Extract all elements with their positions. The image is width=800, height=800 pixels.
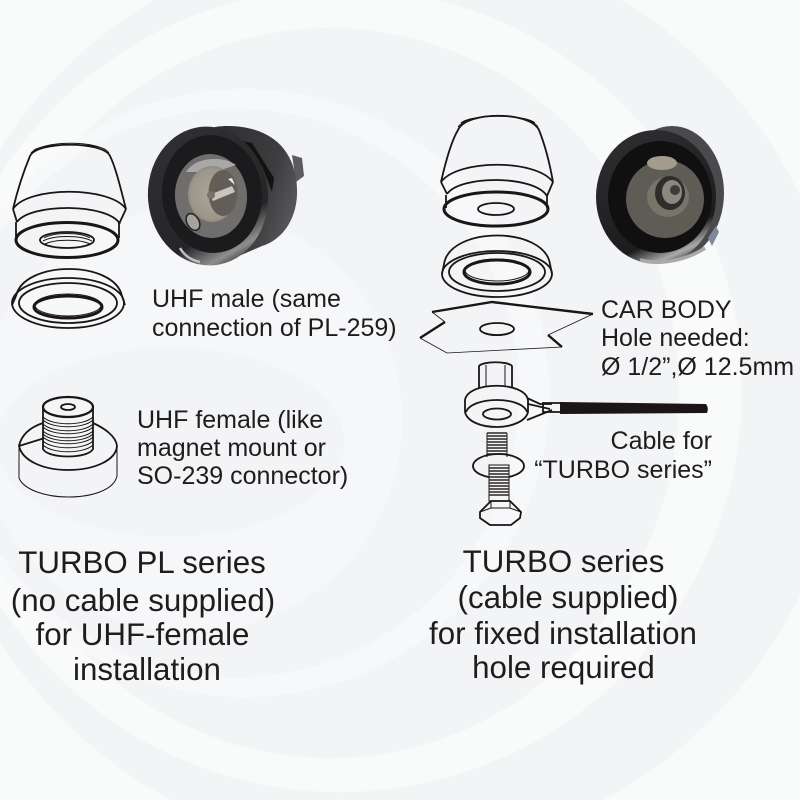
label: car body xyxy=(601,296,794,381)
label: cable xyxy=(534,427,712,484)
icon: left ring washer xyxy=(12,269,125,328)
label: UHF female: magnet mount or xyxy=(137,434,326,462)
panel: TURBO series xyxy=(420,116,794,685)
icon: cable lug and bolt xyxy=(465,362,708,525)
heading: TURBO series xyxy=(429,544,697,685)
panel: TURBO PL series xyxy=(11,122,397,687)
icon: UHF female connector xyxy=(19,397,117,497)
label: UHF male: UHF male (same xyxy=(152,285,341,313)
label: UHF male xyxy=(152,285,397,342)
label: car body: Hole needed: xyxy=(601,324,750,352)
label: UHF female: UHF female (like xyxy=(137,406,323,434)
heading: TURBO PL series xyxy=(11,545,275,687)
label: UHF male: connection of PL-259) xyxy=(152,314,397,342)
label: UHF female xyxy=(137,406,348,490)
label: cable: Cable for xyxy=(611,427,712,455)
heading: TURBO series: TURBO series xyxy=(463,544,664,579)
heading: TURBO PL series: for UHF-female xyxy=(36,617,249,652)
icon: car body plate xyxy=(420,302,593,353)
heading: TURBO series: (cable supplied) xyxy=(458,580,678,615)
label: car body: Ø 1/2”,Ø 12.5mm xyxy=(601,353,794,381)
label: UHF female: SO-239 connector) xyxy=(137,462,348,490)
label: cable: “TURBO series” xyxy=(534,456,712,484)
heading: TURBO series: hole required xyxy=(472,650,655,685)
photo: UHF male connector xyxy=(142,122,304,270)
photo: TURBO base connector xyxy=(596,126,724,264)
heading: TURBO series: for fixed installation xyxy=(429,616,697,651)
icon: right dome cap xyxy=(441,116,553,226)
heading: TURBO PL series: (no cable supplied) xyxy=(11,583,275,618)
heading: TURBO PL series: TURBO PL series xyxy=(18,545,266,580)
label: car body: CAR BODY xyxy=(601,296,732,324)
heading: TURBO PL series: installation xyxy=(73,652,221,687)
icon: right ring washer xyxy=(442,236,552,297)
icon: left dome cap xyxy=(13,143,126,258)
